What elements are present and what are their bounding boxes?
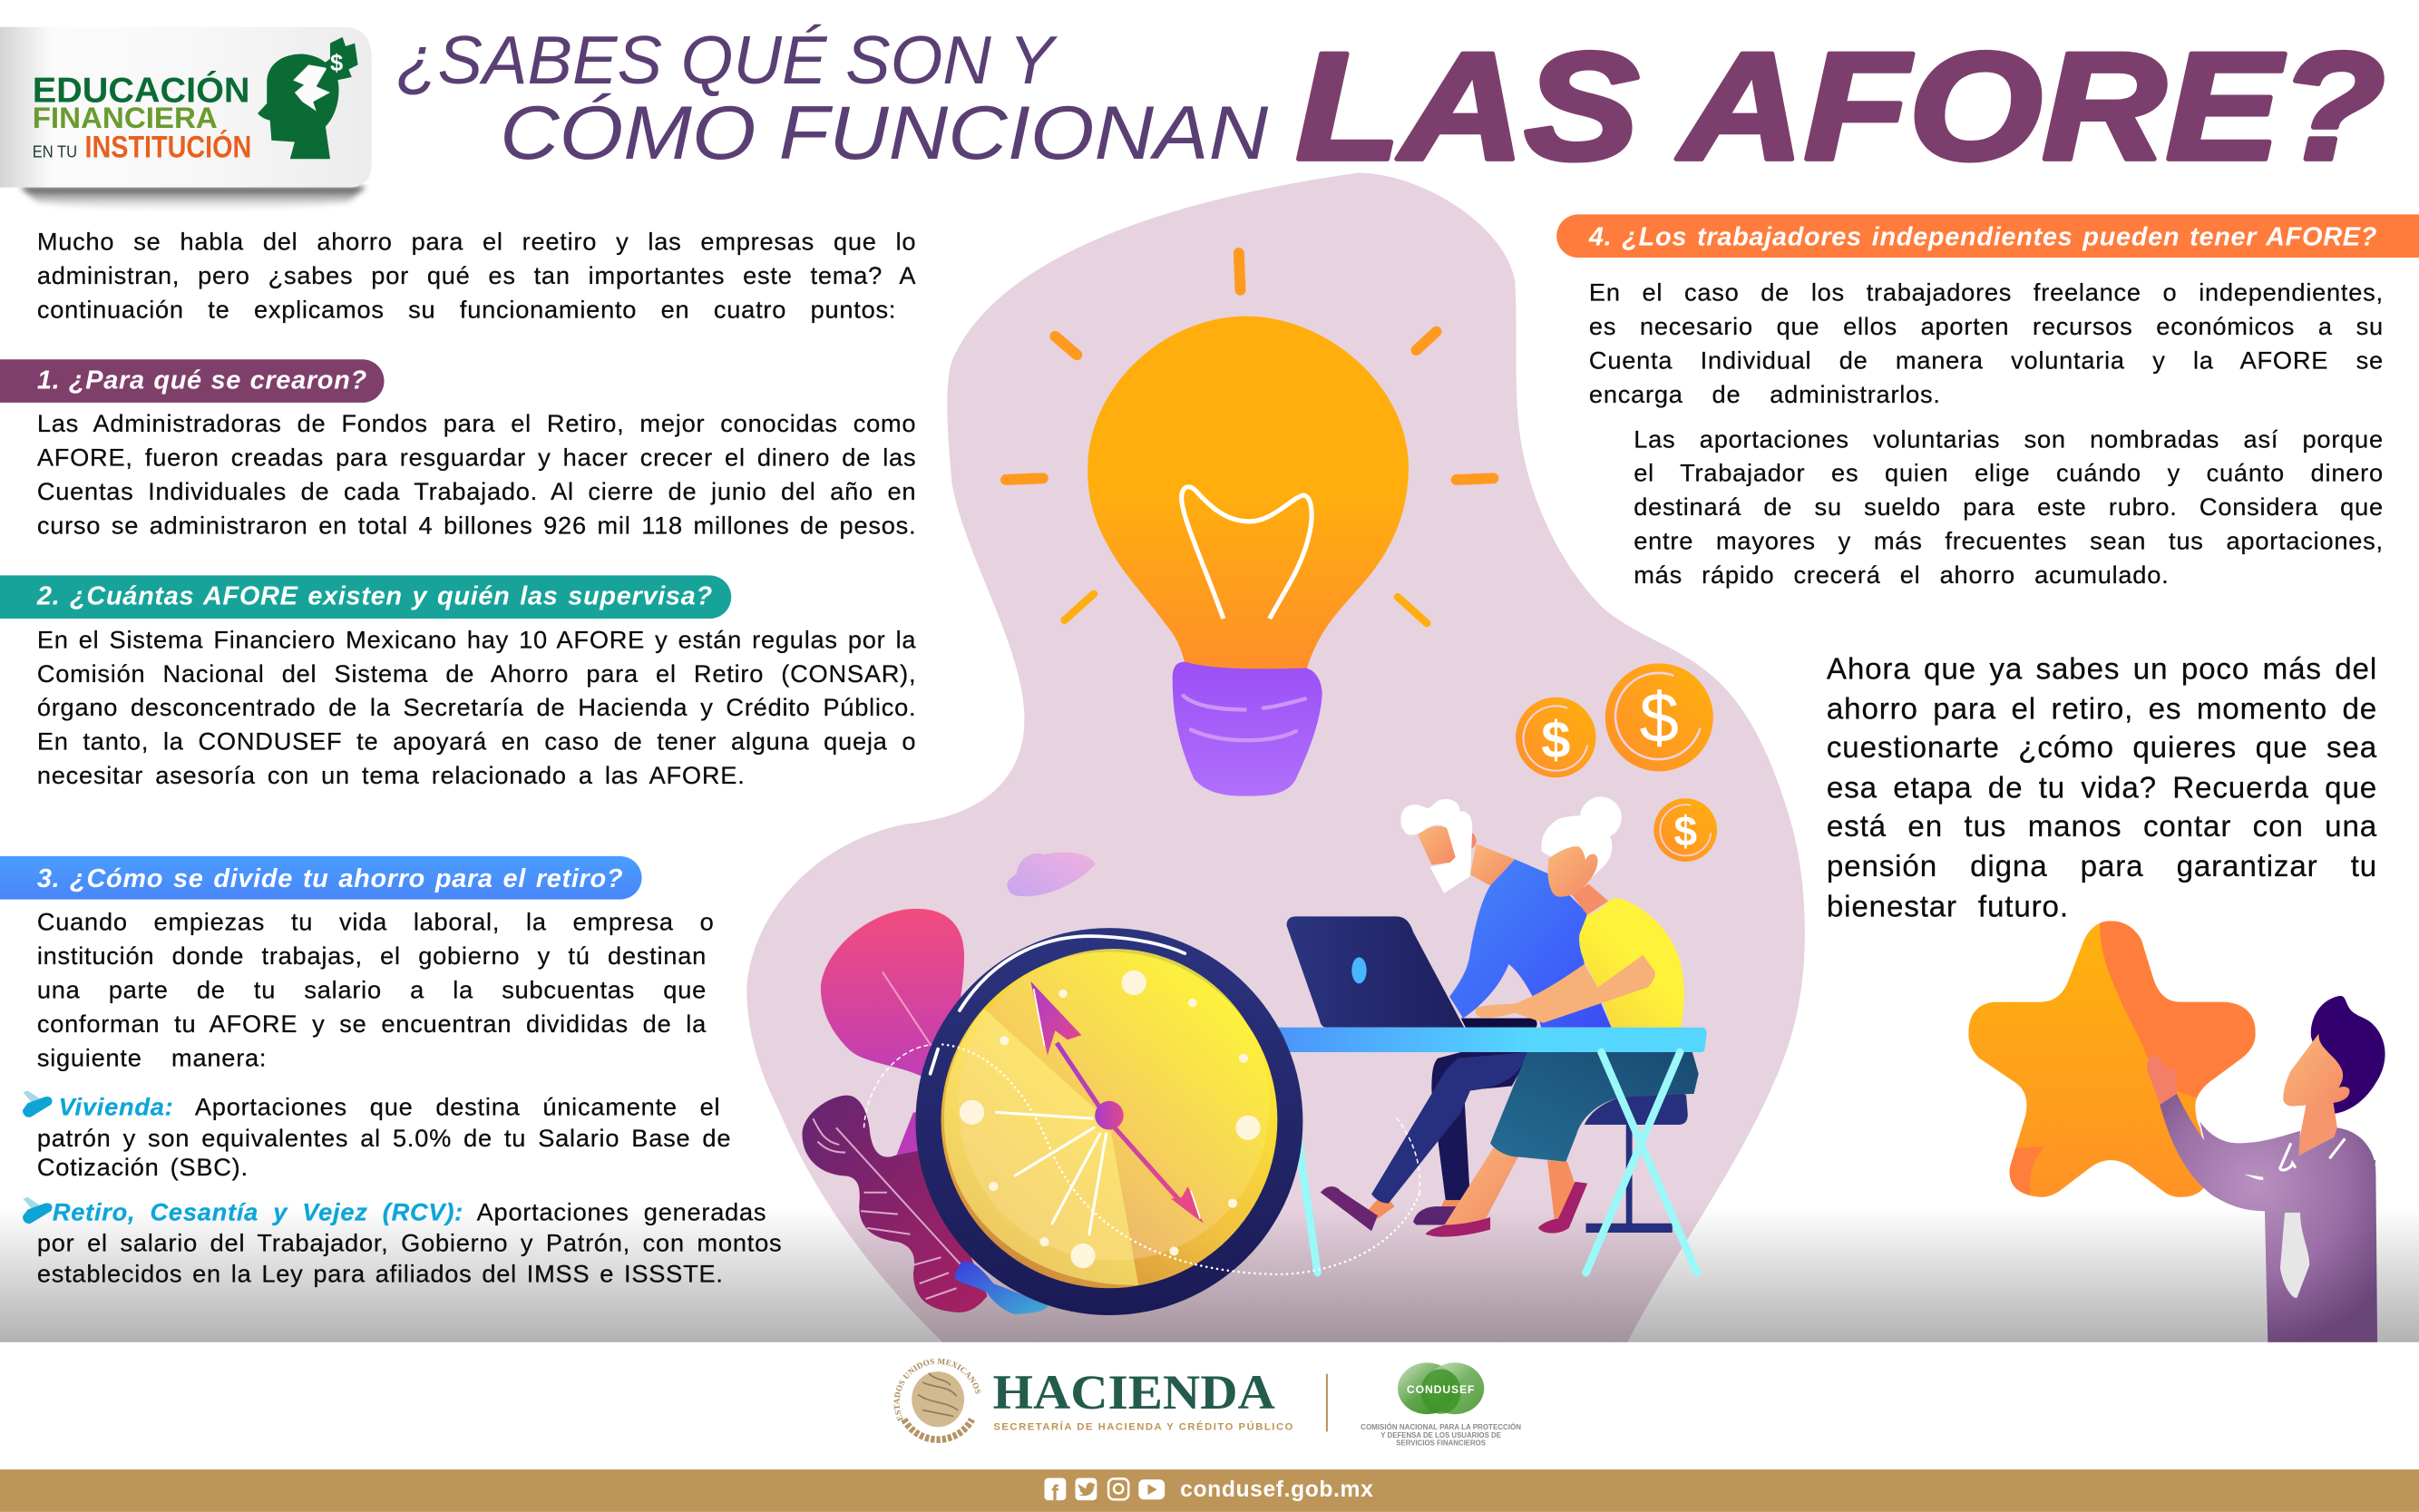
closing paragraph: bienestar futuro. (1827, 890, 2069, 923)
CONDUSEF logo: COMISIÓN NACIONAL PARA LA PROTECCIÓN (1361, 1423, 1521, 1431)
Hacienda wordmark: SECRETARÍA DE HACIENDA Y CRÉDITO PÚBLICO (993, 1421, 1293, 1433)
voluntary contributions text: el Trabajador es quien elige cuándo y cuánto dinero (1634, 462, 2384, 487)
title line 1: ¿SABES QUÉ SON Y (396, 22, 1058, 98)
section 1 heading: 1. ¿Para qué se crearon? (37, 366, 367, 395)
skirt (1490, 1052, 1699, 1162)
laptop dot (1351, 957, 1367, 983)
Hacienda seal: ESTADOS UNIDOS MEXICANOS (894, 1359, 981, 1422)
man face (1418, 826, 1456, 864)
section 2 heading (0, 575, 731, 619)
Retiro item: por el salario del Trabajador, Gobierno y Patrón, con montos (37, 1231, 782, 1257)
filament (1182, 487, 1312, 619)
man neck (1470, 844, 1515, 885)
bulb glass (1088, 317, 1409, 669)
logo: Educación Financiera en tu Institución: INSTITUCIÓN (85, 130, 251, 164)
woman arm (1475, 955, 1655, 1023)
intro paragraph: continuación te explicamos su funcionamiento en cuatro puntos: (37, 298, 896, 324)
man ear (1461, 832, 1477, 851)
Vivienda item (37, 1096, 731, 1183)
Vivienda item: Cotización (SBC). (37, 1156, 249, 1183)
voluntary contributions text (1634, 427, 2384, 590)
people (1257, 797, 1706, 1273)
radial lines (997, 1112, 1107, 1234)
chair (1585, 1092, 1688, 1125)
icon: light bulb (1006, 253, 1493, 796)
icon: bullet RCV (23, 1197, 53, 1224)
section 2 text: órgano desconcentrado de la Secretaría de Hacienda y Crédito Público. (37, 696, 916, 722)
voluntary contributions text: entre mayores y más frecuentes sean tus aportaciones, (1634, 529, 2384, 555)
section 1 text: AFORE, fueron creadas para resguardar y hacer crecer el dinero de las (37, 446, 916, 472)
icon: clock (915, 928, 1302, 1315)
desk legs right (1586, 1052, 1697, 1273)
hour dots (960, 971, 1261, 1268)
man back leg (1431, 1052, 1530, 1200)
icon: star (1968, 921, 2256, 1197)
Vivienda item: patrón y son equivalentes al 5.0% de tu Salario Base de (37, 1126, 731, 1152)
Hacienda wordmark: HACIENDA (993, 1365, 1275, 1419)
section 2 text: En tanto, la CONDUSEF te apoyará en caso de tener alguna queja o (37, 730, 916, 756)
man front leg (1371, 1052, 1527, 1204)
intro paragraph: administran, pero ¿sabes por qué es tan importantes este tema? A (37, 264, 916, 290)
laptop (1287, 916, 1464, 1028)
closing paragraph: está en tus manos contar con una (1827, 811, 2377, 844)
logo: Educación Financiera en tu Institución (0, 27, 372, 210)
icon: bullet Vivienda (23, 1090, 53, 1117)
logo: Educación Financiera en tu Institución: FINANCIERA (33, 102, 218, 134)
hair (2311, 996, 2385, 1114)
laptop keyboard (1461, 1019, 1537, 1028)
section 4 text: es necesario que ellos aporten recursos económicos a su (1589, 315, 2384, 341)
section 3 text: institución donde trabajas, el gobierno y tú destinan (37, 944, 707, 971)
Retiro item: establecidos en la Ley para afiliados del IMSS e ISSSTE. (37, 1262, 724, 1288)
CONDUSEF logo: SERVICIOS FINANCIEROS (1396, 1439, 1487, 1448)
clock ring (915, 928, 1302, 1315)
closing paragraph: cuestionarte ¿cómo quieres que sea (1827, 732, 2377, 766)
closing paragraph: ahorro para el retiro, es momento de (1827, 692, 2377, 726)
tie (2280, 1213, 2309, 1298)
bulb socket (1173, 662, 1322, 796)
CONDUSEF logo (1361, 1362, 1521, 1448)
logo: Educación Financiera en tu Institución: EN TU (33, 141, 77, 161)
plants behind clock (802, 909, 1049, 1314)
section 4 heading (1556, 214, 2419, 258)
section 2 text (37, 628, 916, 790)
voluntary contributions text: más rápido crecerá el ahorro acumulado. (1634, 563, 2169, 590)
blue leaf (955, 1262, 1049, 1314)
section 1 text: Las Administradoras de Fondos para el Retiro, mejor conocidas como (37, 412, 916, 438)
section 3 text: una parte de tu salario a la subcuentas que (37, 978, 707, 1004)
woman face (1548, 846, 1598, 897)
icon: coin left: $ (1541, 711, 1570, 769)
suit body (2200, 1122, 2377, 1342)
icon: coin large: $ (1640, 678, 1679, 757)
icon: coin large (1605, 663, 1713, 771)
section 1 text (36, 412, 916, 540)
website: condusef.gob.mx (1180, 1478, 1373, 1502)
closing paragraph: pensión digna para garantizar tu (1827, 850, 2377, 884)
icon: coin small (1653, 798, 1717, 862)
plum leaf (802, 1096, 988, 1312)
man shoe back (1413, 1206, 1464, 1225)
section 3 text: siguiente manera: (37, 1046, 267, 1072)
woman neck (1572, 884, 1608, 915)
section 3 text: conforman tu AFORE y se encuentran divididas de la (37, 1012, 707, 1039)
woman back shoe (1538, 1182, 1587, 1234)
footer band (0, 1469, 2419, 1512)
icon: head with puzzle (258, 37, 358, 159)
title line 2: CÓMO FUNCIONAN (500, 91, 1269, 175)
pink leaf (821, 909, 964, 1080)
section 1 heading (0, 359, 385, 403)
section 3 text (37, 911, 715, 1072)
neck (2298, 1098, 2337, 1156)
section 2 text: Comisión Nacional del Sistema de Ahorro para el Retiro (CONSAR), (37, 662, 916, 688)
intro paragraph: Mucho se habla del ahorro para el reetiro y las empresas que lo (37, 229, 916, 256)
dotted arc (942, 1045, 1419, 1274)
arm (2160, 1094, 2375, 1211)
bulb rays (1006, 253, 1493, 623)
white shirt detail (2234, 1173, 2263, 1182)
section 4 text: encarga de administrarlos. (1589, 383, 1941, 409)
icon: coin small: $ (1673, 807, 1697, 854)
woman back leg (1547, 1160, 1575, 1225)
man hair and beard (1400, 799, 1472, 893)
intro paragraph (37, 229, 916, 324)
woman front shoe (1426, 1217, 1490, 1237)
section 3 heading: 3. ¿Cómo se divide tu ahorro para el retiro? (37, 863, 623, 893)
section 4 heading: 4. ¿Los trabajadores independientes pueden tener AFORE? (1589, 222, 2377, 251)
clock hands (1057, 1043, 1185, 1206)
woman hair (1580, 797, 1622, 838)
section 2 text: necesitar asesoría con un tema relacionado a las AFORE. (37, 764, 746, 790)
thin dashed arc (863, 1044, 942, 1127)
man front foot (1369, 1193, 1395, 1219)
voluntary contributions text: destinará de su sueldo para este rubro. Considera que (1634, 495, 2384, 522)
Vivienda item: Vivienda: Aportaciones que destina únicamente el (59, 1096, 720, 1122)
woman front leg (1442, 1147, 1518, 1228)
closing paragraph: Ahora que ya sabes un poco más del (1827, 652, 2377, 687)
Retiro item: Retiro, Cesantía y Vejez (RCV): Aportaciones generadas (53, 1200, 766, 1226)
section 2 heading: 2. ¿Cuántas AFORE existen y quién las supervisa? (37, 581, 713, 611)
CONDUSEF logo: CONDUSEF (1407, 1383, 1475, 1396)
section 2 text: En el Sistema Financiero Mexicano hay 10 AFORE y están regulas por la (37, 628, 916, 654)
section 4 text: En el caso de los trabajadores freelance o independientes, (1589, 281, 2384, 307)
logo: Educación Financiera en tu Institución: EDUCACIÓN (33, 70, 250, 110)
section 4 text: Cuenta Individual de manera voluntaria y la AFORE se (1589, 348, 2384, 375)
section 3 heading (0, 856, 642, 900)
man shirt (1449, 859, 1612, 1028)
voluntary contributions text: Las aportaciones voluntarias son nombradas así porque (1634, 427, 2384, 454)
section 3 text: Cuando empiezas tu vida laboral, la empresa o (37, 911, 715, 936)
section 4 text (1589, 281, 2384, 409)
Retiro item (37, 1200, 782, 1288)
clock hub (1095, 1101, 1124, 1130)
closing paragraph: esa etapa de tu vida? Recuerda que (1827, 771, 2377, 805)
ring highlights (931, 936, 1185, 1074)
icon: small cloud (1007, 853, 1096, 896)
man with star (2147, 996, 2385, 1342)
desk legs and chair (1290, 1080, 1688, 1273)
clock face (941, 951, 1277, 1288)
decorative lilac background blob (746, 172, 1805, 1342)
section 1 text: curso se administraron en total 4 billones 926 mil 118 millones de pesos. (37, 513, 916, 540)
icon: coin left (1516, 697, 1596, 777)
man shoe front (1321, 1186, 1378, 1231)
hand (2147, 1055, 2177, 1105)
desk top (1257, 1028, 1706, 1052)
social icons: f (1051, 1481, 1058, 1506)
icon: head with puzzle: $ (330, 51, 343, 76)
pink leaf lower (896, 1112, 932, 1173)
section 1 text: Cuentas Individuales de cada Trabajado. Al cierre de junio del año en (37, 480, 916, 506)
CONDUSEF logo: Y DEFENSA DE LOS USUARIOS DE (1380, 1431, 1502, 1439)
woman shirt (1579, 899, 1684, 1028)
title highlight: LAS AFORE? (1296, 21, 2385, 191)
closing paragraph (1827, 652, 2377, 923)
social icons (1045, 1478, 1165, 1506)
face (2283, 1034, 2349, 1107)
desk leg left (1290, 1080, 1318, 1273)
grey floor gradient (0, 1206, 2419, 1342)
